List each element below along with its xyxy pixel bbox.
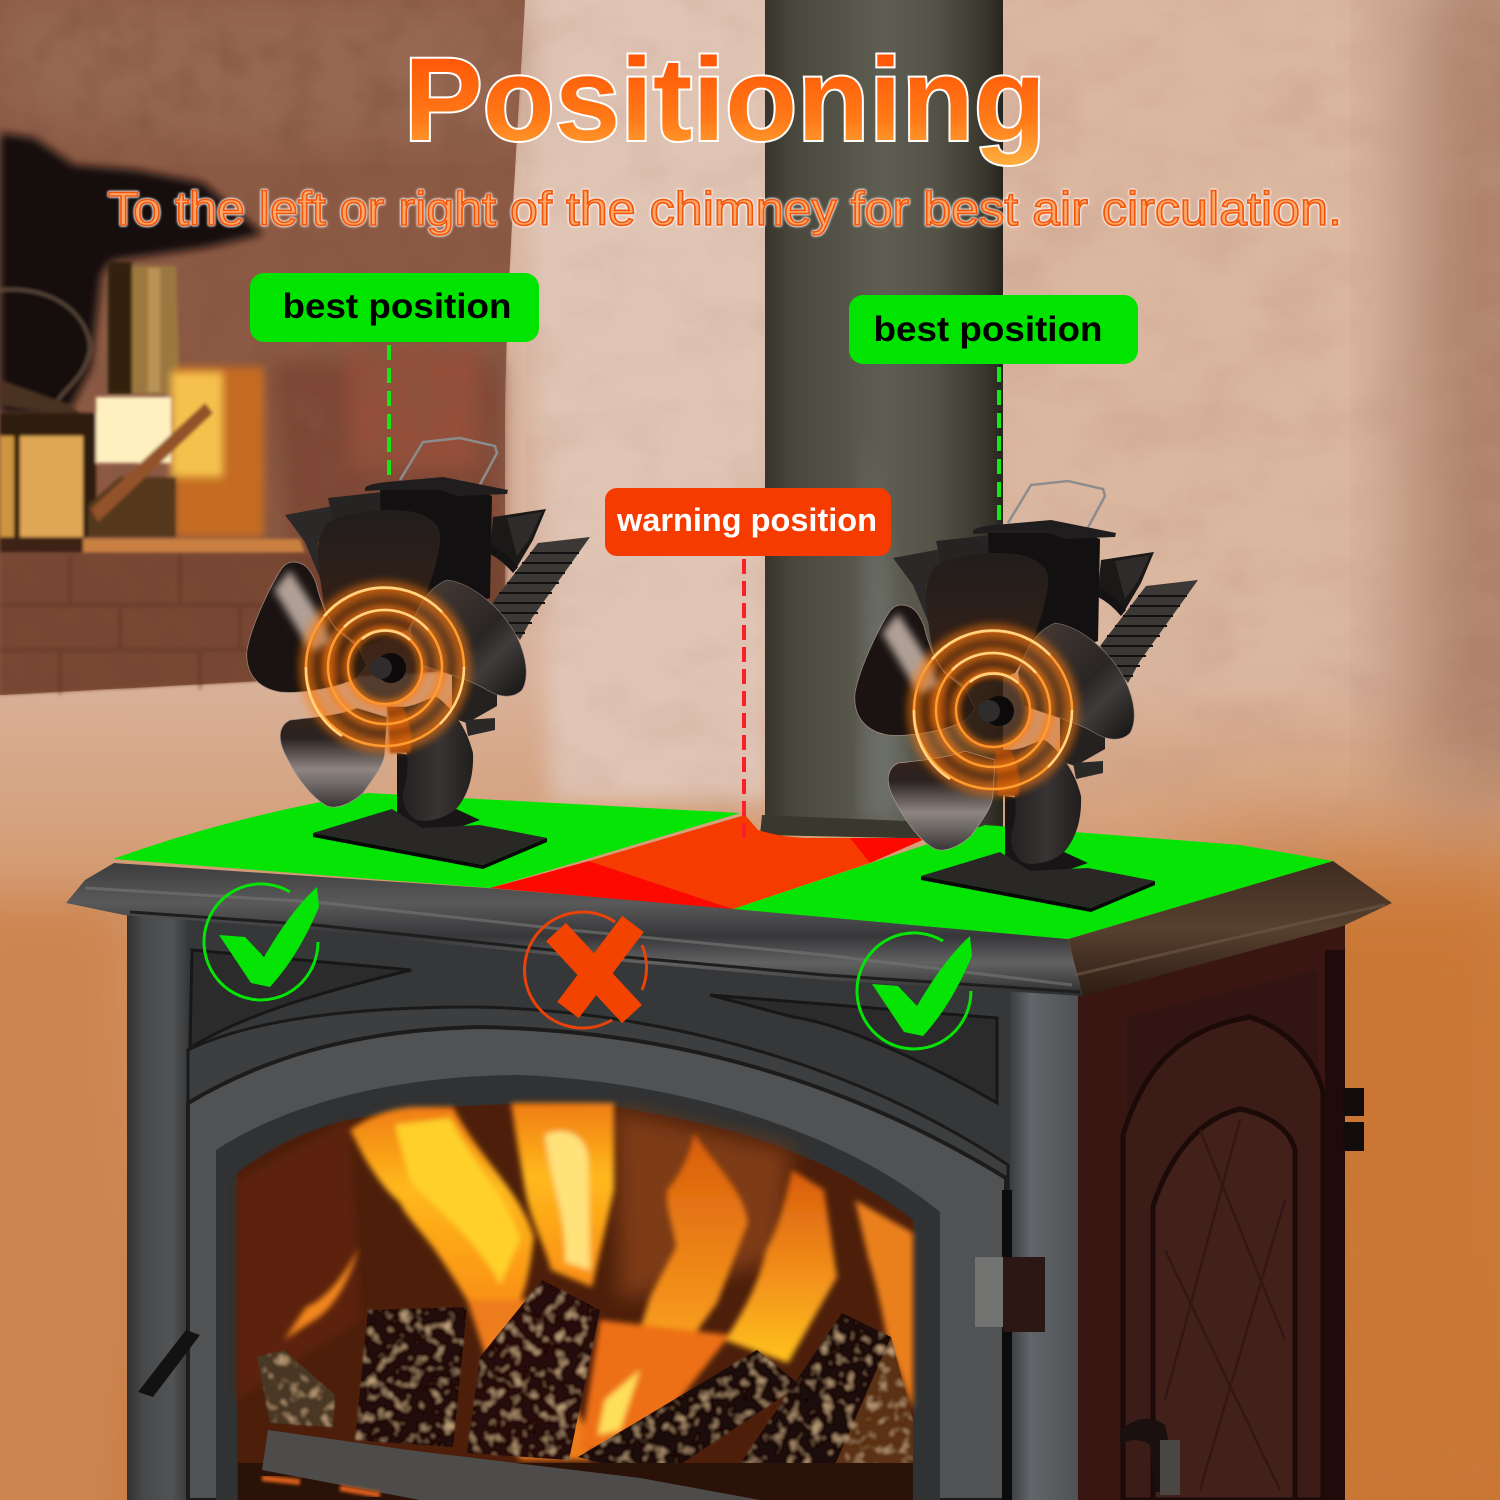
label: warning position: warning position xyxy=(616,502,877,538)
icon: check left xyxy=(204,884,319,1000)
label: best position left xyxy=(250,273,539,482)
label: best position right xyxy=(849,295,1138,524)
right cabinet side xyxy=(1078,925,1364,1500)
logs xyxy=(257,1280,913,1500)
stove body xyxy=(66,861,1392,1500)
label: best position left: best position xyxy=(282,287,512,326)
subtitle: To the left or right of the chimney for best air circulation. xyxy=(108,182,1342,235)
label: best position right: best position xyxy=(874,310,1102,349)
grate xyxy=(238,1463,913,1500)
icon: check right xyxy=(857,933,972,1049)
fan: left xyxy=(247,438,590,869)
icon: cross warning xyxy=(525,912,647,1028)
arch panels xyxy=(190,950,411,1048)
chimney pipe xyxy=(760,0,1003,840)
door hinge xyxy=(975,1190,1045,1500)
zone: red warning xyxy=(490,815,927,909)
zone: green left xyxy=(113,793,740,888)
top moulding xyxy=(66,863,1083,996)
label: warning position xyxy=(605,488,891,845)
zone: green right xyxy=(733,825,1333,939)
fire chamber xyxy=(138,1103,913,1500)
fan: right xyxy=(855,481,1198,912)
brick hearth alcove xyxy=(0,0,525,695)
door latch xyxy=(138,1330,200,1397)
title: Positioning xyxy=(404,34,1046,166)
stove front xyxy=(127,905,1078,1500)
